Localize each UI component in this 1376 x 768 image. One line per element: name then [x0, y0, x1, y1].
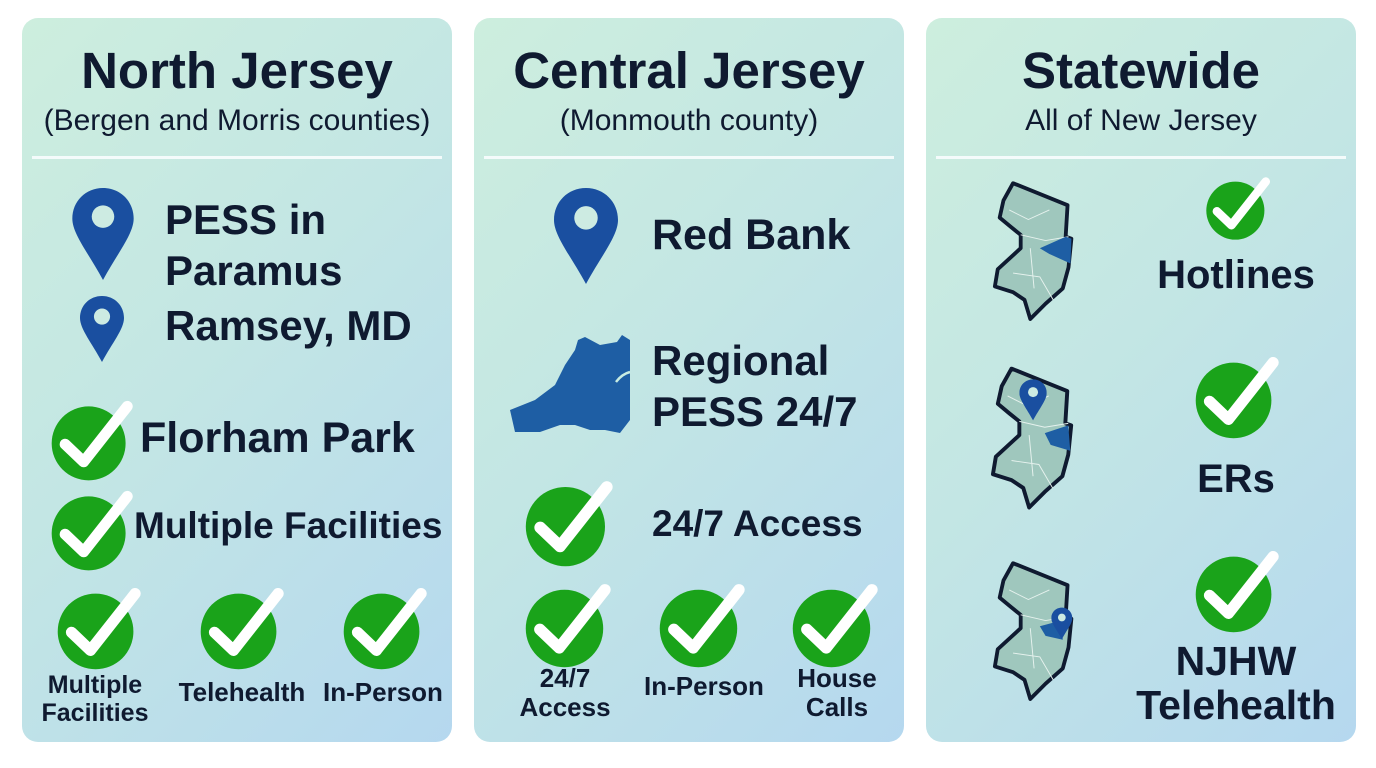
panel: Central Jersey — [474, 18, 904, 742]
subtitle: All of New Jersey — [1025, 104, 1257, 137]
panel: North Jersey — [22, 18, 452, 742]
label: House Calls: Calls — [806, 692, 868, 722]
check: bottom telehealth — [200, 588, 284, 670]
label: In-Person: In-Person — [323, 677, 443, 707]
label: Multiple Facilities: Facilities — [42, 699, 148, 727]
text: NJHW Telehealth — [1136, 638, 1336, 728]
label: Telehealth: Telehealth — [179, 677, 305, 707]
check: bottom house calls — [792, 584, 878, 668]
label: 24/7 Access: 24/7 — [540, 663, 590, 693]
text: ERs: ERs — [1197, 457, 1275, 501]
label: Multiple Facilities: Multiple — [48, 671, 142, 699]
map: NJ hotlines — [992, 181, 1074, 321]
text: Florham Park: Florham Park — [140, 414, 415, 462]
label: Multiple Facilities — [42, 671, 148, 727]
map: NJ ERs — [990, 366, 1074, 510]
text: PESS in Paramus: Paramus — [165, 247, 342, 294]
heading: Statewide: Statewide — [1022, 42, 1260, 99]
text: PESS in Paramus — [165, 196, 342, 294]
check: 24/7 Access — [526, 481, 613, 566]
text: Hotlines: Hotlines — [1157, 253, 1315, 297]
subtitle: (Monmouth county) — [560, 104, 818, 137]
heading: Central Jersey: Central Jersey — [513, 42, 865, 99]
label: House Calls — [797, 663, 877, 722]
check: Florham Park — [52, 400, 133, 480]
map: NJ telehealth — [992, 561, 1074, 701]
check: bottom in-person — [660, 584, 745, 668]
check: ERs — [1196, 357, 1279, 438]
check: Hotlines — [1206, 177, 1270, 240]
text: NJHW Telehealth: Telehealth — [1136, 682, 1336, 728]
label: 24/7 Access — [519, 663, 611, 722]
check: bottom 24/7 — [526, 584, 611, 668]
text: NJHW Telehealth: NJHW — [1176, 638, 1296, 684]
text: Regional PESS 24/7 — [652, 337, 857, 435]
check: Multiple Facilities — [52, 490, 133, 570]
label: 24/7 Access: Access — [519, 692, 611, 722]
text: Regional PESS 24/7: Regional — [652, 337, 829, 384]
label: In-Person: In-Person — [644, 671, 764, 701]
text: Red Bank: Red Bank — [652, 211, 850, 259]
check: bottom multiple facilities — [58, 588, 141, 670]
text: PESS in Paramus: PESS in — [165, 196, 326, 243]
icon: Monmouth county map — [510, 335, 630, 433]
check: NJHW Telehealth — [1196, 551, 1279, 632]
icon: pin Red Bank — [554, 188, 618, 284]
label: House Calls: House — [797, 663, 877, 693]
text: Ramsey, MD: Ramsey, MD — [165, 302, 412, 349]
text: Multiple Facilities: Multiple Facilities — [134, 505, 442, 546]
text: 24/7 Access: 24/7 Access — [652, 503, 863, 544]
icon: pin small — [80, 296, 124, 362]
panel: Statewide — [926, 18, 1356, 742]
icon: pin large — [72, 188, 134, 280]
text: Regional PESS 24/7: PESS 24/7 — [652, 388, 857, 435]
check: bottom in-person — [344, 588, 427, 670]
subtitle: (Bergen and Morris counties) — [44, 104, 430, 137]
heading: North Jersey: North Jersey — [81, 42, 393, 99]
